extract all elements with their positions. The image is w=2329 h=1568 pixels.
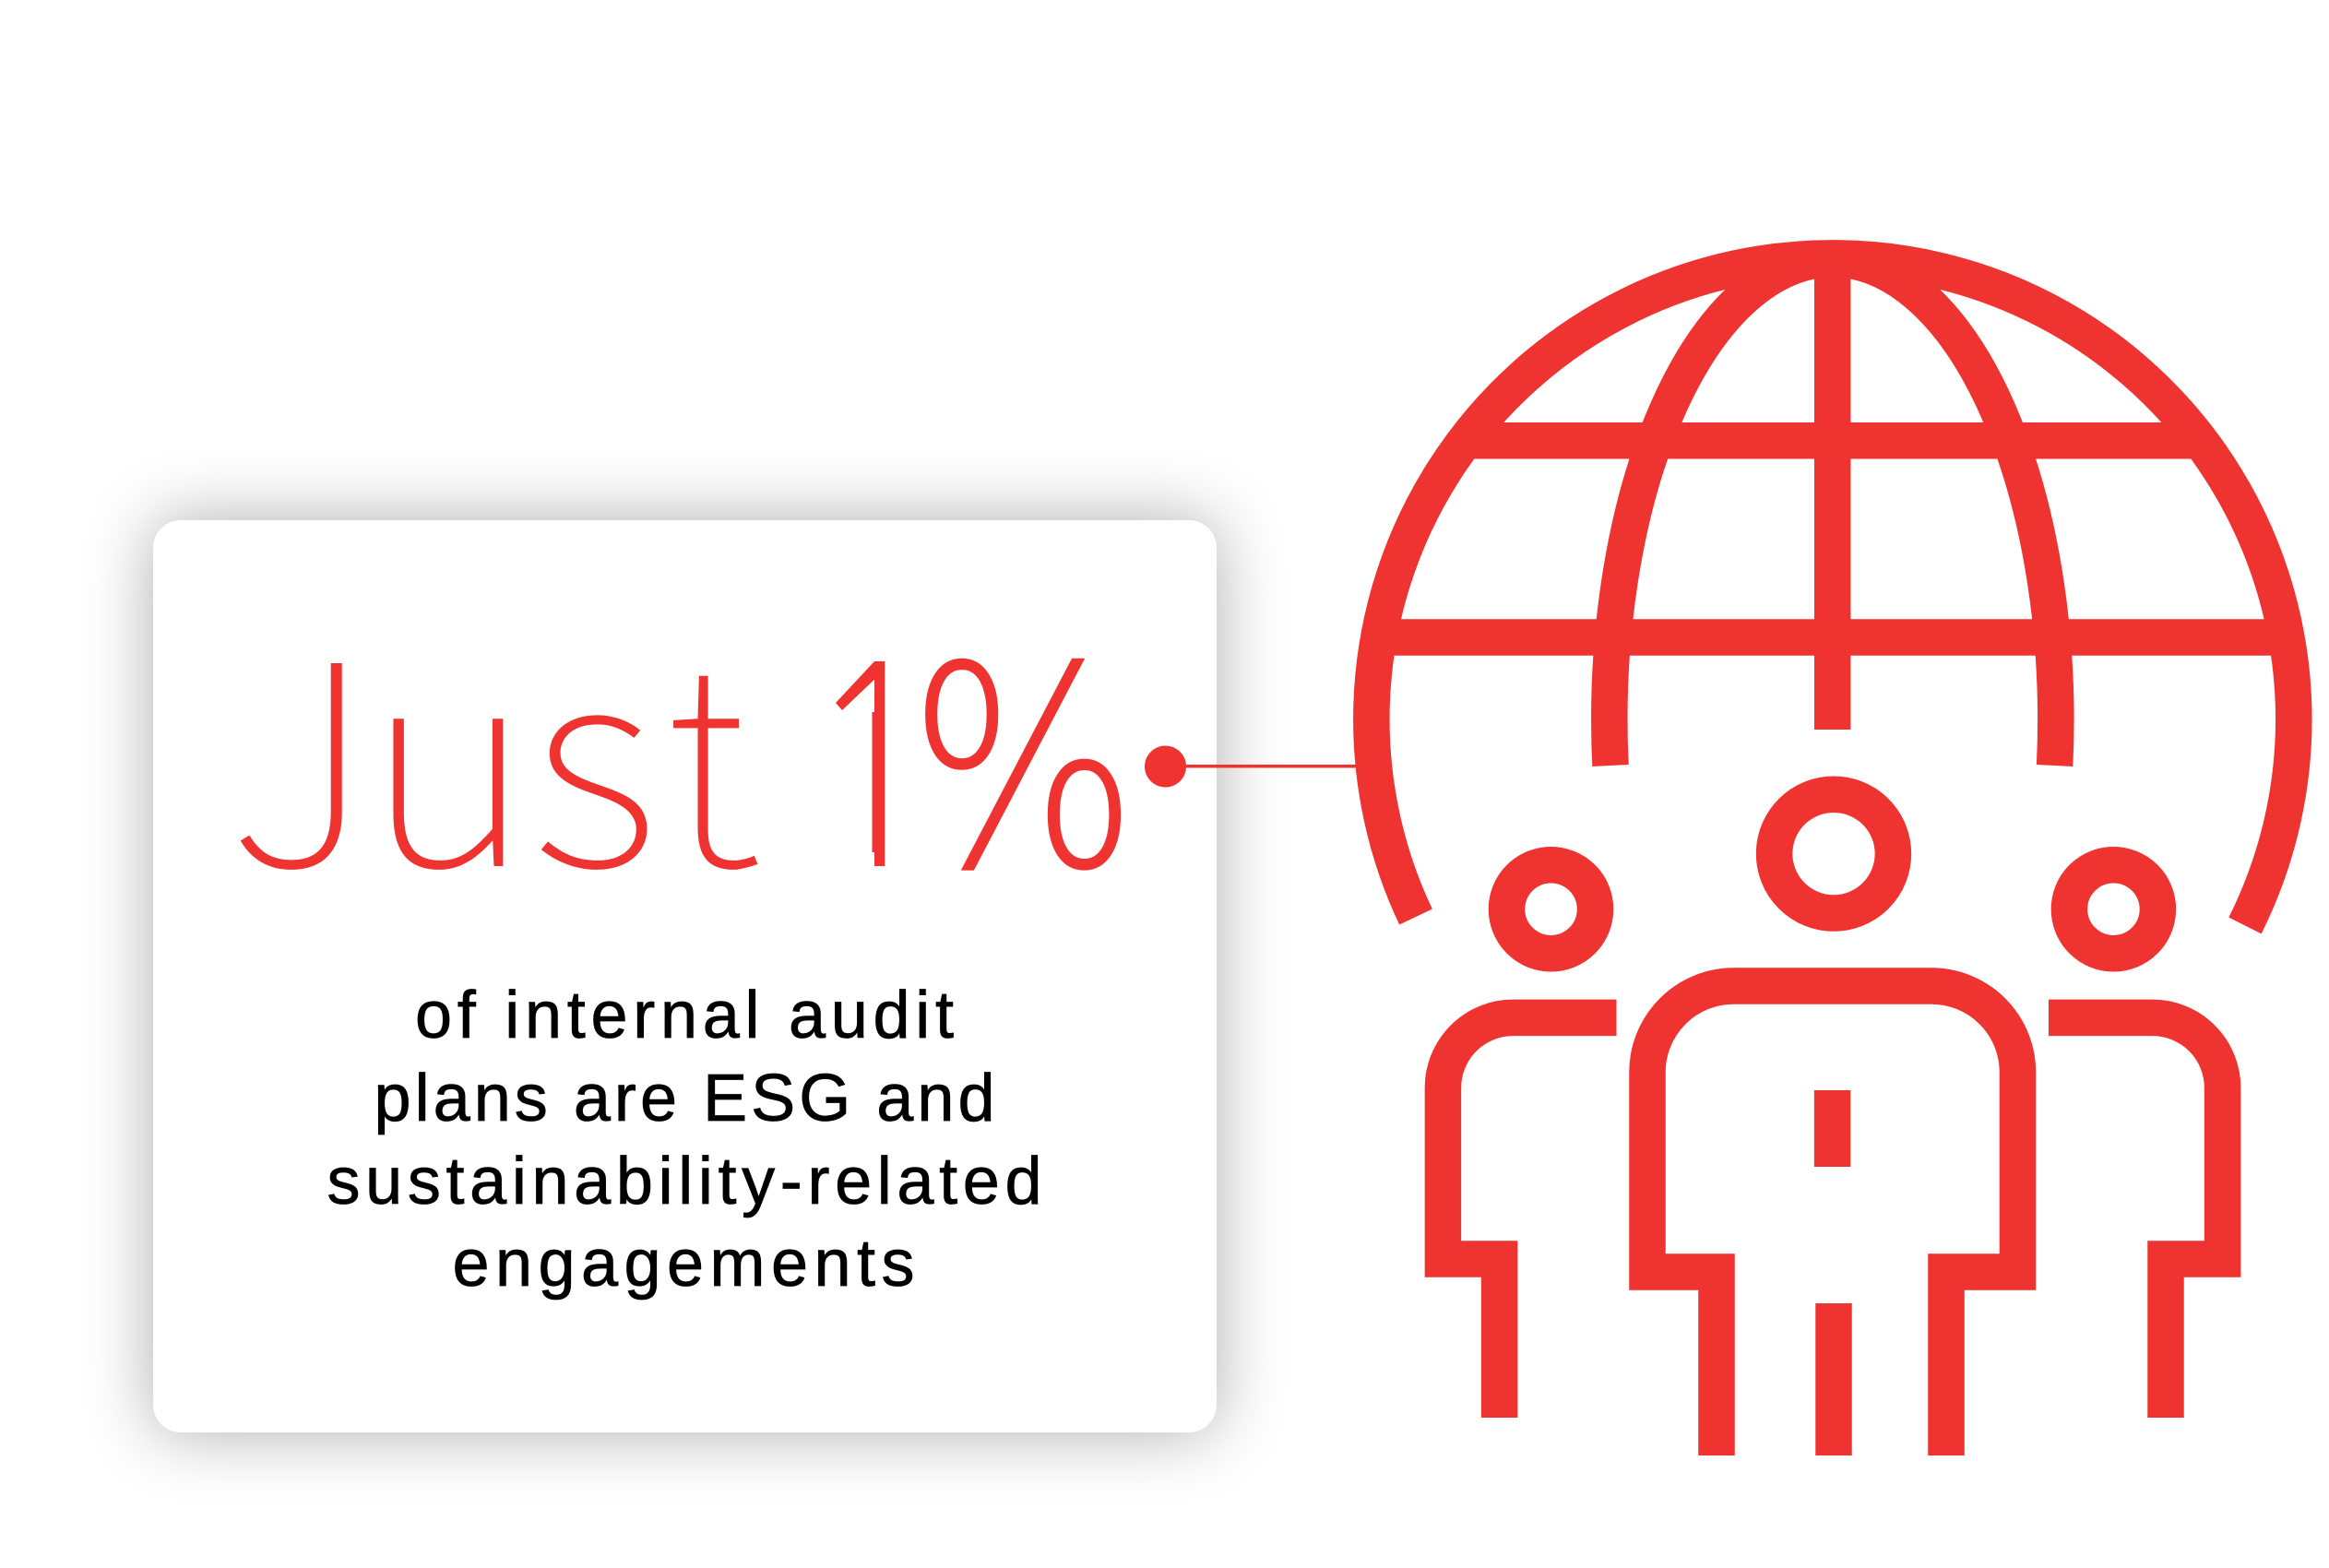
icon: left person bbox=[1443, 865, 1616, 1418]
text block: description: sustainability-related bbox=[327, 1145, 1042, 1218]
text block: description: of internal audit bbox=[415, 979, 954, 1052]
icon: right person bbox=[2049, 865, 2223, 1418]
heading: Just 1%: 1 bbox=[799, 543, 945, 947]
connector: dot and line from card to globe bbox=[1145, 745, 1361, 788]
text block: description bbox=[327, 979, 1042, 1301]
heading: Just 1%: Just bbox=[227, 542, 761, 947]
text block: description: engagements bbox=[452, 1227, 915, 1301]
icon: globe bbox=[1372, 242, 2294, 926]
text block: description: plans are ESG and bbox=[374, 1062, 994, 1135]
heading: Just 1% bbox=[227, 542, 1138, 947]
panel: statistic card bbox=[153, 520, 1217, 1432]
heading: Just 1%: % bbox=[908, 606, 1138, 932]
icon: globe with three people bbox=[1372, 242, 2294, 1455]
icon: centre person bbox=[1647, 794, 2018, 1455]
